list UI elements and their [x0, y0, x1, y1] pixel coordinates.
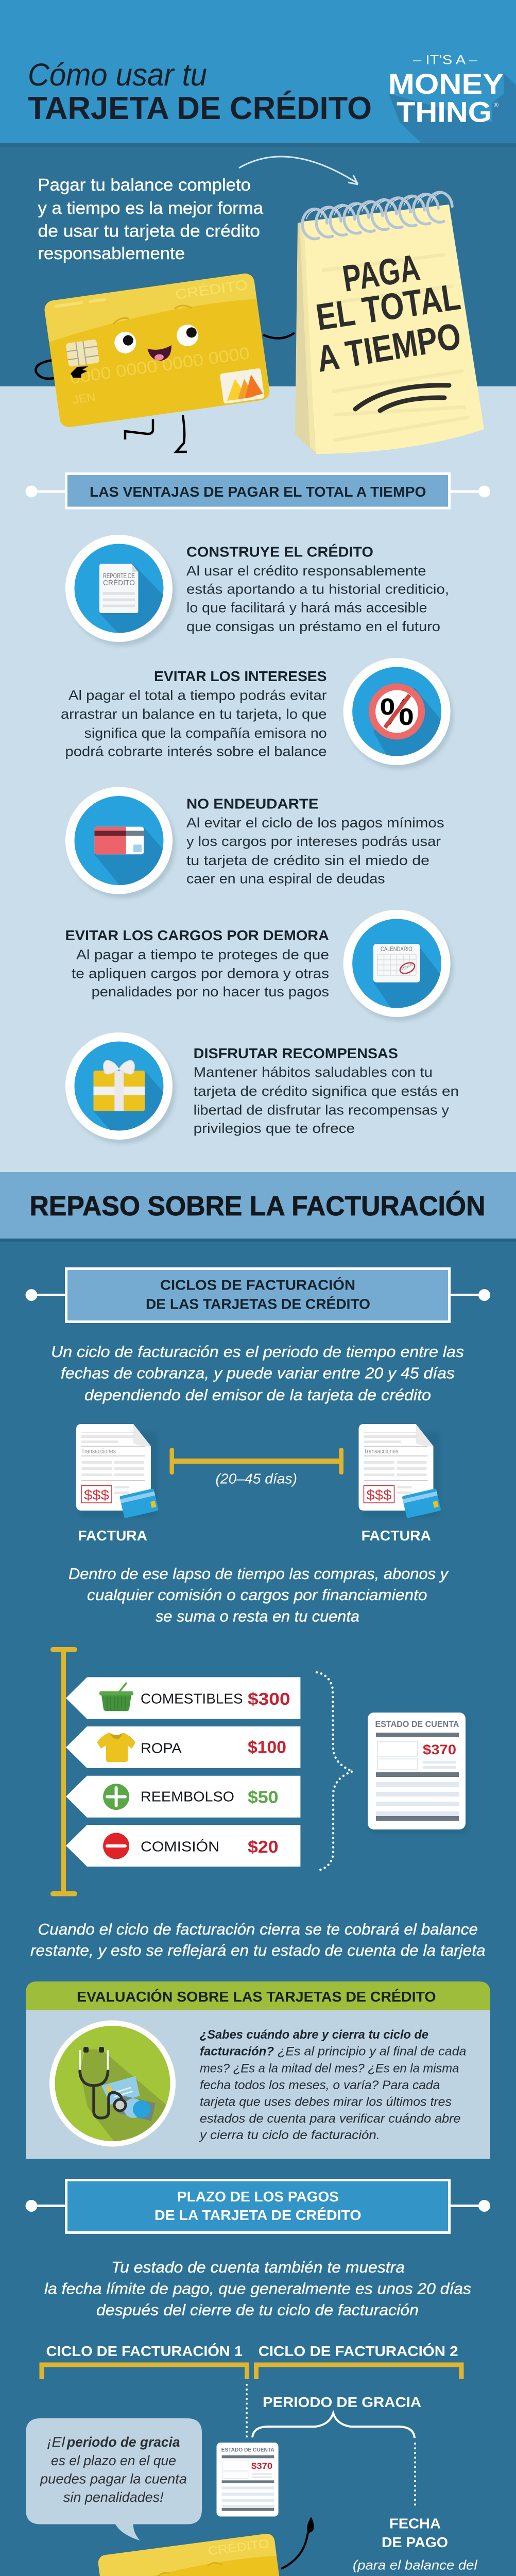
text: purchases within cycle: cualquier comisión o cargos por financiamiento: [87, 1586, 427, 1604]
text: Al usar el crédito responsablemente: [186, 563, 426, 579]
benefit 3: no endeudarte: [65, 787, 444, 907]
section header: ventajas: LAS VENTAJAS DE PAGAR EL TOTAL A TIEMPO: [90, 484, 426, 500]
panel text: mes? ¿Es a la mitad del mes? ¿Es en la misma: [200, 2062, 459, 2075]
character: yellow credit card: [36, 273, 295, 452]
notepad spiral rings: [302, 192, 452, 239]
logo: It's a Money Thing header: – IT’S A –: [413, 53, 477, 67]
panel text: [199, 2028, 467, 2142]
icon: credit report: [65, 535, 177, 647]
character: yellow credit card: CRÉDITO: [174, 277, 249, 302]
text: lo que facilitará y hará más accesible: [186, 600, 427, 616]
text: podrá cobrarte interés sobre el balance: [65, 743, 326, 759]
panel text: tarjeta que uses debes mirar los últimos tres: [200, 2095, 452, 2109]
chart: billing cycle brackets: [42, 2343, 461, 2509]
notepad: paga el total a tiempo: [295, 192, 484, 454]
statement document small: ESTADO DE CUENTA: [221, 2447, 274, 2453]
text: purchases within cycle: se suma o resta en tu cuenta: [156, 1607, 359, 1625]
text: libertad de disfrutar las recompensas y: [194, 1103, 450, 1118]
text: definition of billing cycle: Un ciclo de facturación es el periodo de tiempo entre las: [51, 1343, 464, 1361]
text: Al pagar el total a tiempo podrás evitar: [68, 688, 326, 703]
text: [186, 815, 444, 886]
icon: minus: [103, 1833, 129, 1859]
section header: plazo de los pagos: PLAZO DE LOS PAGOS: [177, 2189, 339, 2205]
intro text: y a tiempo es la mejor forma: [38, 198, 264, 217]
text: cycle closes: Cuando el ciclo de facturación cierra se te cobrará el balance: [38, 1920, 478, 1938]
chart: billing cycle brackets: CICLO DE FACTURACIÓN 1: [46, 2343, 243, 2359]
timeline bar: 20 to 45 days: (20–45 días): [215, 1470, 297, 1486]
callout: periodo de gracia: puedes pagar la cuenta: [40, 2471, 187, 2486]
vertical timeline: [50, 1647, 77, 1896]
text: arrastrar un balance en tu tarjeta, lo que: [61, 706, 326, 722]
section header: ciclos de facturación: CICLOS DE FACTURACIÓN: [160, 1277, 355, 1293]
text: [72, 947, 329, 999]
callout: periodo de gracia: [26, 2418, 202, 2540]
transaction: ropa: [66, 1726, 300, 1768]
text: purchases within cycle: [68, 1565, 449, 1625]
transaction: comisión: $20: [248, 1837, 279, 1856]
icon: left bill document: [76, 1424, 159, 1518]
statement document: ESTADO DE CUENTA: [375, 1719, 459, 1729]
section header: plazo de los pagos: DE LA TARJETA DE CRÉDITO: [154, 2207, 362, 2223]
text: definition of billing cycle: [51, 1343, 464, 1404]
text: que consigas un préstamo en el futuro: [186, 619, 440, 634]
text: due date: la fecha límite de pago, que generalmente es unos 20 días: [44, 2280, 471, 2298]
benefit 2: evitar los intereses: [61, 658, 454, 770]
logo: It's a Money Thing header: [388, 53, 516, 143]
transaction: ropa: ROPA: [141, 1740, 182, 1756]
text: [186, 563, 449, 634]
statement document small: [216, 2443, 279, 2516]
section header: ciclos de facturación: [26, 1268, 490, 1322]
text: definition of billing cycle: dependiendo del emisor de la tarjeta de crédito: [84, 1386, 431, 1404]
icon: right bill document: Transacciones: [364, 1448, 399, 1455]
panel: evaluación 1: [26, 1981, 490, 2164]
panel: evaluación 1: EVALUACIÓN SOBRE LAS TARJETAS DE CRÉDITO: [77, 1989, 436, 2005]
icon: no percent: [343, 658, 454, 770]
label: fecha de pago: DE PAGO: [382, 2534, 448, 2550]
dotted brace: [317, 1672, 353, 1871]
intro text: de usar tu tarjeta de crédito: [38, 222, 260, 240]
heading: NO ENDEUDARTE: [186, 795, 318, 811]
transaction: reembolso: $50: [248, 1787, 279, 1806]
panel text: fecha todos los meses, o varía? Para cada: [200, 2078, 440, 2092]
chart: billing cycle brackets: CICLO DE FACTURACIÓN 2: [259, 2343, 458, 2359]
callout: periodo de gracia: ¡El: [47, 2434, 65, 2450]
heading: CONSTRUYE EL CRÉDITO: [186, 544, 373, 560]
transaction: comisión: COMISIÓN: [141, 1838, 219, 1855]
icon: right bill document: $$$: [367, 1487, 391, 1503]
background: intro band: [0, 143, 516, 386]
text: penalidades por no hacer tus pagos: [92, 984, 329, 999]
icon: credit report: REPORTE DE: [103, 572, 135, 580]
logo: It's a Money Thing header: MONEY: [388, 67, 504, 100]
transaction: comisión: [66, 1825, 300, 1867]
logo: It's a Money Thing header: THING: [397, 96, 492, 128]
transaction: reembolso: REEMBOLSO: [141, 1789, 234, 1805]
icon: right bill document: [358, 1424, 441, 1518]
logo: It's a Money Thing header: ®: [494, 101, 498, 109]
text: Al evitar el ciclo de los pagos mínimos: [186, 815, 444, 831]
label: fecha de pago: (para el balance del: [353, 2557, 478, 2573]
text: privilegios que te ofrece: [194, 1121, 355, 1136]
text: Al pagar a tiempo te proteges de que: [76, 947, 329, 962]
callout: periodo de gracia: periodo de gracia: [66, 2434, 180, 2450]
panel text: ¿Es al principio y al final de cada: [278, 2045, 467, 2059]
intro text: [38, 175, 264, 263]
statement document small: $370: [251, 2461, 272, 2471]
chart: billing cycle brackets: PERIODO DE GRACIA: [263, 2394, 421, 2410]
label: fecha de pago: [342, 2515, 488, 2576]
transaction: reembolso: [66, 1776, 300, 1818]
icon: plus: [103, 1784, 129, 1810]
text: significa que la compañía emisora no: [84, 725, 327, 741]
text: estás aportando a tu historial crediticio,: [186, 582, 449, 597]
transaction: comestibles: $300: [248, 1689, 290, 1708]
icon: calendar: VENCE: [401, 963, 414, 972]
statement document: $370: [423, 1742, 456, 1757]
background: benefits band: [0, 386, 516, 1172]
heading: EVITAR LOS INTERESES: [154, 668, 326, 684]
background: billing section: [0, 1239, 516, 2576]
text: [194, 1064, 459, 1136]
section header: ciclos de facturación: DE LAS TARJETAS DE CRÉDITO: [146, 1296, 370, 1312]
text: te apliquen cargos por demora y otras: [72, 965, 329, 981]
panel text: ¿Sabes cuándo abre y cierra tu ciclo de: [200, 2028, 428, 2042]
panel text: y cierra tu ciclo de facturación.: [199, 2128, 380, 2142]
background: billing heading band: [0, 1172, 516, 1239]
section header: ventajas: [26, 474, 490, 508]
text: caer en una espiral de deudas: [186, 871, 385, 886]
character: yellow credit card: 0000 0000 0000 0000: [68, 343, 251, 387]
transaction: comestibles: COMESTIBLES: [141, 1690, 243, 1706]
text: definition of billing cycle: fechas de cobranza, y puede variar entre 20 y 45 días: [61, 1364, 455, 1382]
intro text: Pagar tu balance completo: [38, 175, 251, 194]
icon: left bill document: Transacciones: [81, 1448, 116, 1455]
heading: repaso sobre la facturación: REPASO SOBRE LA FACTURACIÓN: [30, 1191, 485, 1222]
label: factura left: FACTURA: [78, 1528, 147, 1544]
text: y los cargos por intereses podrás usar: [186, 834, 441, 849]
section header: plazo de los pagos: [26, 2180, 490, 2233]
heading: EVITAR LOS CARGOS POR DEMORA: [65, 927, 329, 943]
notepad handwriting: [314, 247, 464, 380]
text: tu tarjeta de crédito sin el miedo de: [186, 853, 429, 868]
statement document: [368, 1713, 468, 1834]
icon: stethoscope on cards: [49, 2021, 176, 2164]
character: waving credit card: CRÉDITO: [207, 2536, 270, 2558]
transaction: ropa: $100: [248, 1737, 286, 1757]
text: [61, 688, 327, 759]
notepad handwriting: A TIEMPO: [314, 315, 464, 380]
text: due date: después del cierre de tu ciclo de facturación: [96, 2301, 419, 2319]
icon: gift: [65, 1032, 176, 1145]
timeline bar: 20 to 45 days: [170, 1448, 343, 1486]
character: waving credit card: [76, 2517, 314, 2576]
background: header band: [0, 0, 516, 143]
icon: shirt: [97, 1733, 135, 1762]
text: due date: Tu estado de cuenta también te muestra: [111, 2258, 405, 2276]
benefit 1: construye el crédito: [65, 535, 448, 647]
label: fecha de pago: FECHA: [389, 2515, 441, 2531]
transaction: comestibles: [66, 1677, 300, 1719]
title: [28, 57, 372, 126]
title: TARJETA DE CRÉDITO: [28, 91, 372, 126]
icon: calendar: [343, 910, 454, 1022]
label: factura right: FACTURA: [362, 1528, 431, 1544]
icon: calendar: CALENDARIO: [381, 945, 412, 953]
text: cycle closes: restante, y esto se reflejará en tu estado de cuenta de la tarjeta: [30, 1941, 485, 1959]
text: cycle closes: [30, 1920, 485, 1959]
benefit 5: disfrutar recompensas: [65, 1032, 459, 1154]
callout: periodo de gracia: sin penalidades!: [63, 2489, 164, 2505]
heading: DISFRUTAR RECOMPENSAS: [194, 1045, 398, 1061]
intro text: responsablemente: [38, 244, 185, 263]
icon: basket: [99, 1683, 133, 1711]
text: tarjeta de crédito significa que estás en: [194, 1083, 459, 1099]
character: yellow credit card: JEN: [72, 391, 96, 406]
arrow: intro to notepad: [239, 157, 358, 184]
panel text: facturación?: [200, 2045, 274, 2059]
text: purchases within cycle: Dentro de ese lapso de tiempo las compras, abonos y: [68, 1565, 449, 1583]
notepad handwriting: PAGA: [340, 247, 423, 300]
text: due date: [44, 2258, 471, 2319]
icon: left bill document: $$$: [84, 1487, 109, 1503]
title: Cómo usar tu: [28, 57, 207, 92]
benefit 4: evitar los cargos por demora: [65, 910, 463, 1030]
text: Mantener hábitos saludables con tu: [194, 1064, 433, 1080]
icon: no percent: %: [380, 690, 414, 733]
notepad handwriting: EL TOTAL: [314, 276, 463, 338]
icon: card back: [65, 787, 176, 899]
callout: periodo de gracia: es el plazo en el que: [51, 2453, 176, 2468]
icon: credit report: CRÉDITO: [103, 579, 135, 587]
panel text: estados de cuenta para verificar cuándo abre: [200, 2112, 461, 2126]
